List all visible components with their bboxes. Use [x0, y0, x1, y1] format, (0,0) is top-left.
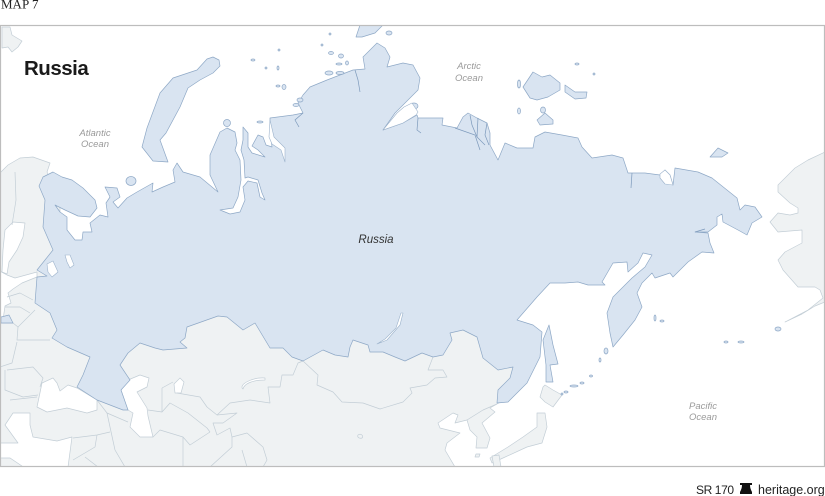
Lake Onega — [65, 255, 74, 268]
land: Alaska — [770, 152, 825, 322]
icon: liberty bell — [740, 483, 752, 494]
Lake Ladoga — [47, 261, 58, 277]
Vaygach — [224, 120, 230, 126]
label: Arctic Ocean: Ocean — [455, 73, 483, 84]
land: Honshu — [490, 413, 547, 463]
label: Pacific Ocean: Pacific — [689, 401, 717, 412]
land: Europe and Asia — [0, 157, 516, 467]
Wrangel Island — [710, 148, 728, 157]
Sakhalin — [543, 325, 558, 382]
Russian lakes and gulfs — [47, 103, 673, 344]
Bolshevik island — [540, 107, 546, 113]
label: Russia: Russia — [358, 234, 394, 246]
label: Atlantic Ocean — [78, 128, 111, 150]
label: Pacific Ocean: Ocean — [689, 412, 717, 423]
mainland Russia — [35, 43, 762, 410]
Kaliningrad — [1, 315, 13, 323]
label: Pacific Ocean — [689, 401, 717, 423]
small islands — [251, 31, 781, 395]
Baltic Sea — [1, 272, 38, 316]
land: Svalbard — [2, 27, 22, 52]
label: Arctic Ocean — [455, 61, 483, 84]
Lyakhovsky island — [565, 85, 587, 99]
title: Russia — [24, 57, 89, 80]
Lake Balkhash — [242, 378, 265, 389]
Lake Baikal — [377, 313, 403, 344]
Novaya Zemlya — [142, 57, 220, 162]
Sea of Okhotsk bay — [660, 170, 673, 185]
Aegean and Mediterranean Sea — [0, 413, 72, 467]
Yenisei Gulf — [269, 120, 285, 162]
Khatanga Gulf — [383, 103, 418, 130]
Kotelny south island — [537, 113, 553, 125]
Aral Sea — [174, 378, 184, 393]
land: Kyushu — [492, 455, 501, 467]
country borders — [0, 172, 497, 467]
label: Atlantic Ocean: Ocean — [81, 139, 109, 150]
panel: Russia — [1, 25, 781, 410]
river deltas — [295, 70, 705, 232]
land: Hokkaido — [540, 385, 562, 407]
Kolguev — [126, 176, 136, 186]
Taymyr offshore island — [412, 102, 418, 109]
label: Arctic Ocean: Arctic — [456, 61, 481, 72]
Black Sea — [37, 378, 97, 413]
Gulf of Bothnia — [2, 222, 25, 274]
label: Atlantic Ocean: Atlantic — [78, 128, 111, 139]
seas and lakes in neighbouring land — [0, 222, 265, 467]
Caspian Sea — [121, 375, 153, 437]
Severnaya Zemlya — [356, 25, 383, 37]
New Siberian Islands — [523, 72, 560, 100]
North African coast — [1, 458, 22, 466]
land: Jeju and Shikoku — [475, 454, 480, 457]
